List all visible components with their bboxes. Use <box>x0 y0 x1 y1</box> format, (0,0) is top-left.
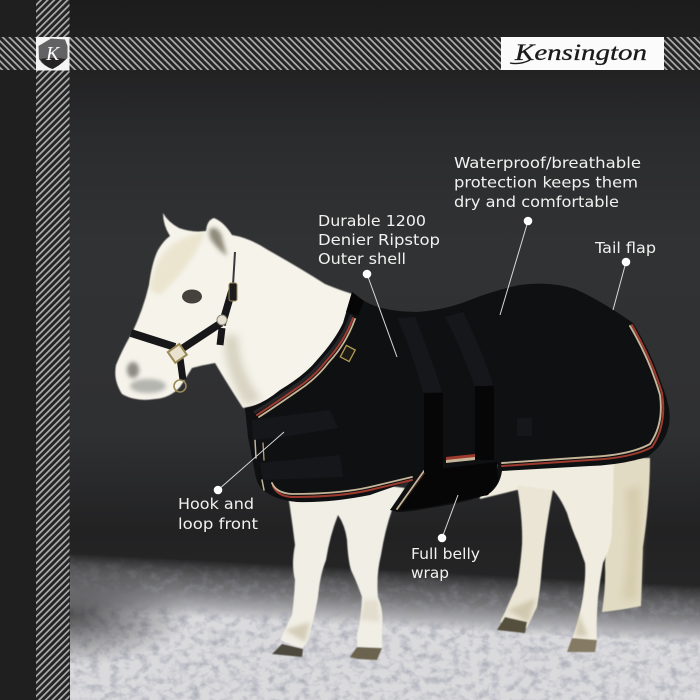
callout: waterproof: Waterproof/breathable <box>454 154 641 172</box>
belly straps <box>397 312 532 511</box>
callout: tail flap <box>594 239 656 310</box>
pony legs and belly <box>272 452 614 660</box>
icon: K shield logo: K <box>45 43 61 65</box>
brand logo: Kensington <box>501 37 664 70</box>
hind far leg <box>553 470 613 642</box>
callout: waterproof: dry and comfortable <box>454 193 619 211</box>
hem trim <box>255 325 663 510</box>
neck collar <box>346 292 364 316</box>
eye <box>182 290 202 304</box>
blanket <box>245 284 670 512</box>
muzzle shading <box>130 379 166 393</box>
callout: waterproof <box>454 154 641 315</box>
callout: waterproof: protection keeps them <box>454 174 638 192</box>
carpeted floor <box>70 540 700 700</box>
vertical striped band <box>36 0 70 700</box>
ear inner <box>209 228 227 256</box>
jaw shading <box>225 335 262 405</box>
front legs <box>280 480 405 648</box>
callout: hook and loop <box>178 432 284 533</box>
callout: ripstop shell: Outer shell <box>318 250 406 268</box>
neckline trim <box>255 316 355 417</box>
callout: hook and loop: Hook and <box>178 495 254 513</box>
horizontal striped band <box>0 37 700 70</box>
callout: hook and loop: loop front <box>178 515 258 533</box>
leg shading <box>285 598 588 642</box>
D ring <box>340 345 355 362</box>
forelock <box>150 232 205 295</box>
callout: ripstop shell: Denier Ripstop <box>318 231 440 249</box>
callout: ripstop shell: Durable 1200 <box>318 212 426 230</box>
halter <box>131 252 237 392</box>
callout: belly wrap <box>411 495 480 582</box>
hook and loop front straps <box>252 410 343 480</box>
hind near leg <box>500 485 553 628</box>
tail <box>602 458 650 612</box>
icon: K shield logo <box>36 37 70 70</box>
callout: belly wrap: wrap <box>411 564 449 582</box>
pony head and neck <box>115 213 353 408</box>
blanket shell <box>245 284 670 512</box>
callout: ripstop shell <box>318 212 440 357</box>
callout: tail flap: Tail flap <box>594 239 656 257</box>
hooves <box>272 617 597 660</box>
belly <box>478 452 614 505</box>
callout: belly wrap: Full belly <box>411 545 480 563</box>
brand logo: Kensington: Kensington <box>514 40 647 65</box>
